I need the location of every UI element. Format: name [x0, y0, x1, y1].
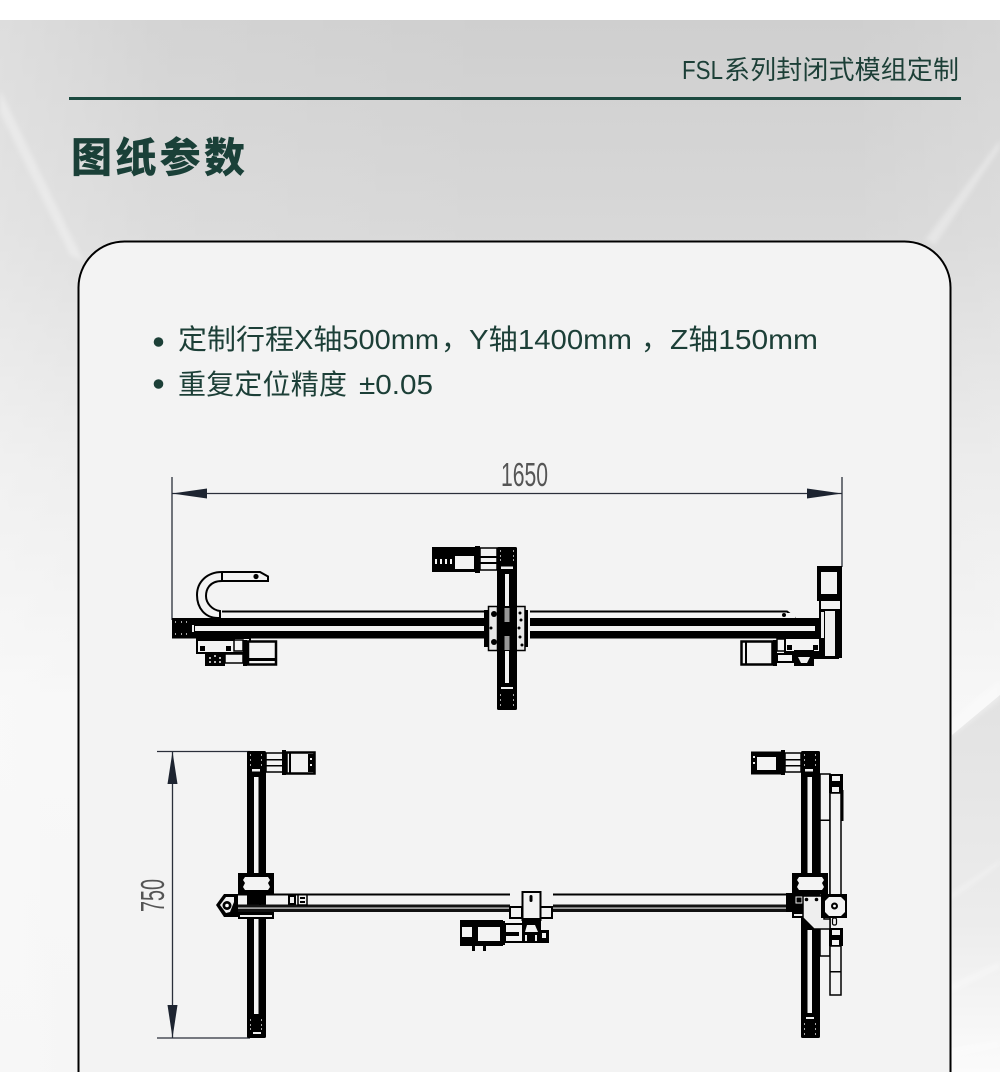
side cable chain	[820, 774, 844, 995]
spec list: ±0.05	[359, 369, 433, 400]
cross beam	[238, 894, 800, 912]
cable chain	[197, 572, 795, 618]
spec list	[154, 324, 818, 400]
panel: drawing card	[78, 242, 950, 1072]
spec list: 定制行程X轴500mm	[178, 324, 439, 355]
left drive motor	[197, 638, 276, 666]
lower carriage motor	[460, 918, 549, 951]
spec list: Y轴1400mm	[469, 324, 632, 355]
dimension: 750 height	[134, 751, 250, 1038]
vertical carriage rail	[497, 547, 517, 710]
carriage plate	[484, 606, 528, 651]
right rail	[801, 751, 820, 1038]
end motor column	[814, 566, 842, 659]
dimension: 750 height: 750	[134, 879, 171, 912]
spec list: 重复定位精度	[178, 369, 347, 400]
title: 图纸参数	[71, 124, 245, 184]
right drive motor	[742, 638, 822, 666]
spec list: Z轴150mm	[670, 324, 818, 355]
header rule	[69, 97, 961, 100]
top motor	[432, 546, 497, 573]
front view drawing	[172, 546, 842, 710]
dimension: 1650 width	[172, 456, 842, 620]
header label: 系列封闭式模组定制	[724, 55, 959, 85]
right clamp and end bracket	[786, 873, 830, 929]
left rail	[247, 751, 266, 1038]
spec list: ，	[641, 324, 669, 355]
right rail motor	[751, 750, 801, 775]
header label: FSL	[682, 55, 723, 85]
left end cap	[216, 894, 238, 917]
left clamp	[238, 873, 274, 919]
spec list: ，	[441, 324, 469, 355]
dimension: 1650 width: 1650	[501, 456, 548, 493]
centre carriage	[510, 892, 552, 920]
top view drawing	[216, 750, 847, 1038]
end motor	[821, 894, 847, 925]
horizontal beam	[172, 613, 822, 638]
left rail motor	[266, 750, 314, 775]
